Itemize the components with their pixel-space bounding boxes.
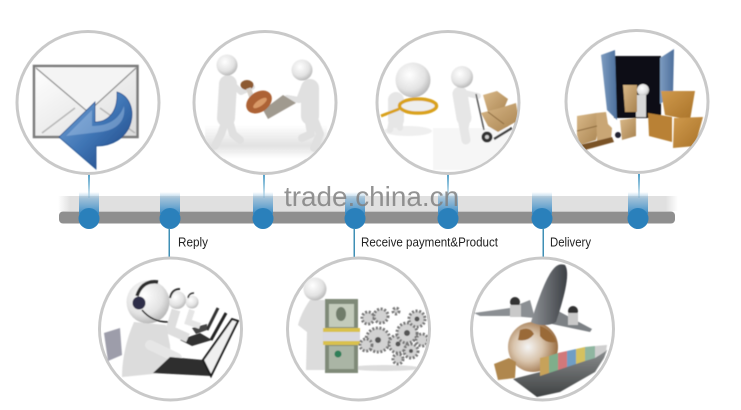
timeline (58, 174, 678, 257)
label: Reply: Reply (178, 236, 209, 250)
icon: call centre agents (100, 258, 242, 400)
icon: shipping container and crates (566, 30, 708, 172)
icon: magnifier inspection and hand truck (377, 32, 519, 174)
icon: email reply (17, 32, 159, 174)
watermark: trade.china.cn (284, 181, 459, 212)
label: Delivery: Delivery (550, 236, 592, 250)
label: Receive payment & Product: Receive payment&Product (361, 236, 498, 250)
icon: air and sea freight (472, 258, 614, 400)
icon: two figures stamping document (194, 32, 336, 174)
icon: money and gears (288, 258, 430, 400)
